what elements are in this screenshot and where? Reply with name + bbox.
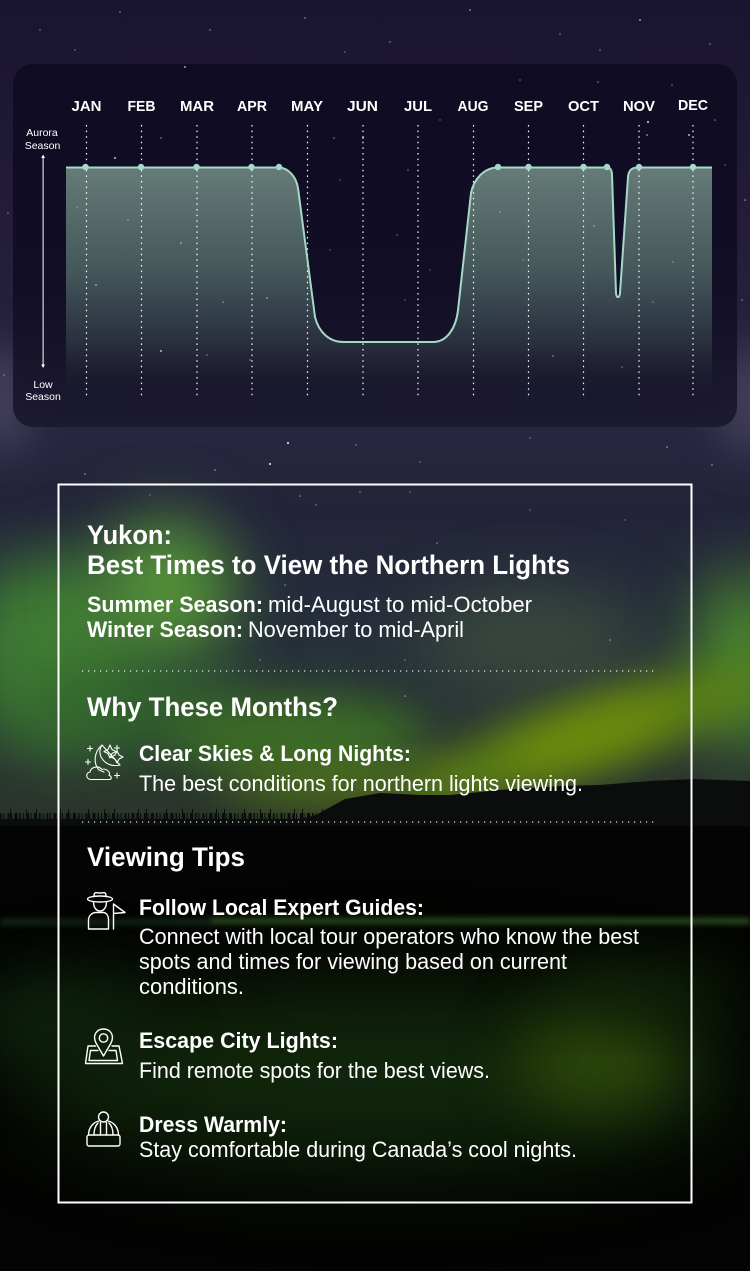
- chart: label aurora season: Season: [25, 140, 60, 152]
- text: season dates: November to mid-April: [248, 617, 464, 642]
- chart: month gridlines: [86, 125, 693, 396]
- icon: winter hat: [87, 1112, 120, 1146]
- item: clear skies and long nights: The best conditions for northern lights viewing.: [139, 771, 583, 796]
- chart: panel stars: [76, 66, 726, 368]
- chart: area under season curve: [66, 167, 712, 405]
- text: season dates: [87, 592, 532, 642]
- icon: map pin: [86, 1029, 122, 1064]
- background: hills and tree line: [0, 779, 750, 1271]
- item: clear skies and long nights: Clear Skies & Long Nights:: [139, 741, 411, 766]
- heading: yukon best times: Yukon:: [87, 520, 172, 550]
- text: season dates: Summer Season:: [87, 592, 263, 617]
- chart: season curve: [66, 168, 712, 342]
- item: follow local expert guides: spots and times for viewing based on current: [139, 949, 567, 974]
- chart: curve markers: [82, 164, 696, 170]
- item: follow local expert guides: conditions.: [139, 974, 244, 999]
- item: follow local expert guides: Follow Local Expert Guides:: [139, 895, 424, 920]
- chart: month labels: JUL: [404, 98, 432, 115]
- chart: month labels: OCT: [568, 98, 599, 115]
- heading: viewing tips: Viewing Tips: [87, 842, 245, 872]
- item: follow local expert guides: [139, 895, 639, 999]
- chart: month labels: AUG: [458, 98, 488, 115]
- chart: month labels: SEP: [514, 98, 543, 115]
- item: follow local expert guides: Connect with local tour operators who know the best: [139, 924, 639, 949]
- heading: why these months: Why These Months?: [87, 692, 338, 722]
- chart: month labels: MAR: [180, 98, 214, 115]
- panel: info box: [58, 484, 692, 1202]
- chart: month labels: [72, 97, 708, 115]
- heading: yukon best times: [87, 520, 570, 580]
- chart: month labels: MAY: [291, 98, 323, 115]
- item: escape city lights: Find remote spots for the best views.: [139, 1058, 490, 1083]
- chart: month labels: NOV: [623, 98, 655, 115]
- chart: month labels: DEC: [678, 97, 708, 114]
- chart: month labels: JUN: [347, 98, 378, 115]
- chart: y-axis arrow: [41, 154, 45, 368]
- background: lake reflection: [0, 918, 750, 1165]
- chart: month labels: FEB: [128, 98, 156, 115]
- heading: yukon best times: Best Times to View the Northern Lights: [87, 550, 570, 580]
- item: dress warmly: [139, 1112, 577, 1162]
- item: escape city lights: [139, 1028, 490, 1083]
- panel: season chart: [13, 64, 737, 427]
- icon: moon, stars and cloud: [86, 745, 123, 780]
- item: dress warmly: Dress Warmly:: [139, 1112, 287, 1137]
- item: escape city lights: Escape City Lights:: [139, 1028, 338, 1053]
- icon: guide with flag: [88, 893, 125, 929]
- text: season dates: mid-August to mid-October: [268, 592, 532, 617]
- chart: label low season: Season: [25, 391, 61, 403]
- background: stars: [3, 9, 746, 697]
- chart: label low season: Low: [33, 379, 53, 391]
- text: season dates: Winter Season:: [87, 617, 243, 642]
- item: dress warmly: Stay comfortable during Canada’s cool nights.: [139, 1137, 577, 1162]
- item: clear skies and long nights: [139, 741, 583, 796]
- chart: month labels: JAN: [72, 98, 102, 115]
- chart: month labels: APR: [237, 98, 267, 115]
- chart: label aurora season: Aurora: [26, 127, 58, 139]
